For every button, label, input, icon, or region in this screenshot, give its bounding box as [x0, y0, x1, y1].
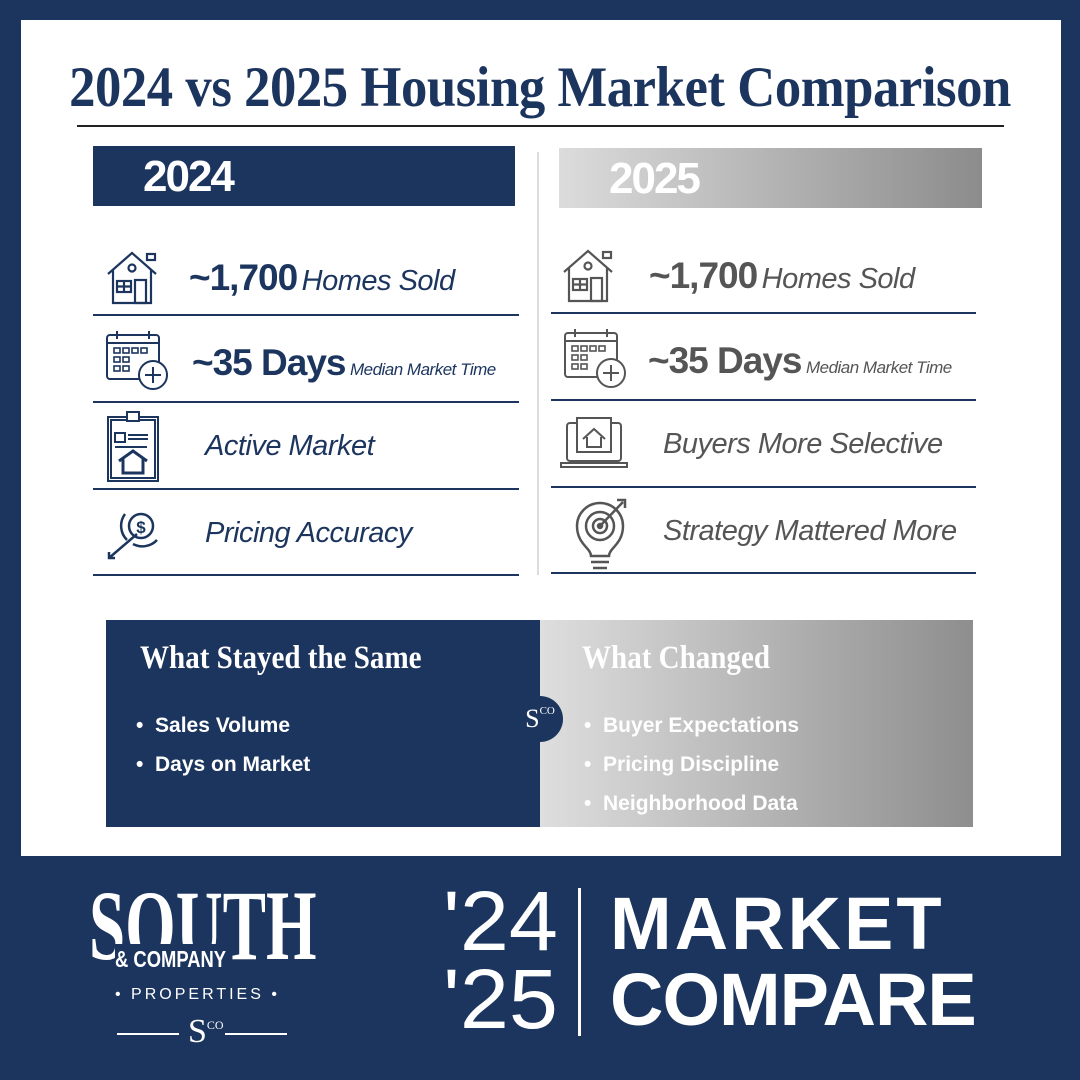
row: days: ~35 Days Median Market Time [648, 340, 952, 380]
panel: what changed [540, 620, 973, 827]
panel: 2024 rows [93, 252, 519, 576]
bullets: • Neighborhood Data [584, 792, 798, 815]
icon: listing sheet [107, 411, 159, 482]
row: buyers selective: Buyers More Selective [663, 428, 943, 460]
row: homes sold: ~1,700 Homes Sold [189, 256, 455, 298]
row: active market: Active Market [205, 430, 374, 462]
bullets [584, 714, 799, 815]
header: 2024 [93, 146, 515, 206]
icon: dollar target [108, 512, 158, 560]
heading: What Stayed the Same [140, 640, 422, 676]
row: pricing accuracy [108, 512, 414, 560]
icon: house [107, 252, 157, 304]
row: pricing accuracy: Pricing Accuracy [205, 517, 412, 549]
header: 2024: 2024 [143, 152, 233, 201]
bullets: • Sales Volume [136, 714, 290, 737]
row: active market [107, 411, 376, 482]
icon: SCO badge [517, 696, 563, 742]
footer years: '24 [443, 874, 558, 968]
row: strategy [576, 498, 957, 570]
icon: calendar [106, 331, 168, 390]
header: 2025: 2025 [609, 154, 699, 203]
row: homes sold: ~1,700 Homes Sold [649, 254, 915, 296]
title: 2024 vs 2025 Housing Market Comparison [69, 56, 1011, 119]
icon: laptop house [560, 417, 628, 468]
footer logo: SOUTH [89, 870, 317, 981]
row: days [106, 331, 496, 390]
row: strategy: Strategy Mattered More [663, 515, 957, 547]
footer logo [89, 870, 317, 1050]
footer logo: & COMPANY [115, 946, 226, 972]
footer logo: • PROPERTIES • [115, 986, 280, 1003]
bullets: • Buyer Expectations [584, 714, 799, 737]
footer title [610, 882, 976, 1041]
row: homes sold [563, 250, 916, 302]
header: 2025 [559, 148, 982, 208]
footer years: '25 [443, 952, 558, 1046]
heading: What Changed [582, 640, 770, 676]
footer years [443, 874, 558, 1046]
bullets [136, 714, 310, 776]
bullets: • Days on Market [136, 753, 310, 776]
row: buyers selective [560, 417, 943, 468]
icon: calendar [564, 329, 626, 388]
icon: house [563, 250, 613, 302]
white panel [21, 20, 1061, 856]
row: homes sold [107, 252, 456, 304]
row: days: ~35 Days Median Market Time [192, 342, 496, 382]
icon: dollar target: $ [136, 518, 146, 536]
bullets: • Pricing Discipline [584, 753, 779, 776]
panel: 2025 rows [551, 250, 976, 574]
icon: SCO badge: SCO [525, 704, 555, 733]
icon: bulb target [576, 498, 626, 570]
footer title: MARKET [610, 882, 945, 965]
panel: what stayed the same [106, 620, 540, 827]
row: days [564, 329, 952, 388]
footer title: COMPARE [610, 958, 976, 1041]
footer logo: SCO [188, 1013, 224, 1050]
